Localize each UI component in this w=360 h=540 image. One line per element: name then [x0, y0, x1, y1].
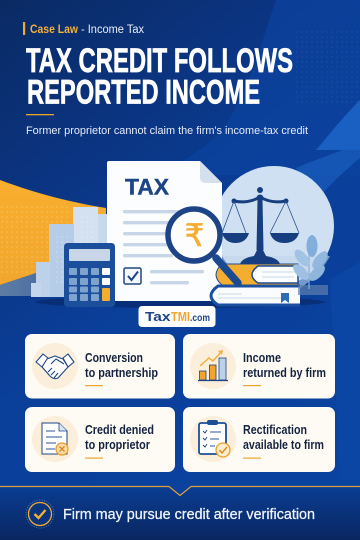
orange wedge — [0, 180, 106, 296]
light circle — [214, 166, 334, 286]
card: rectification: Rectification — [243, 423, 307, 437]
ground shadow — [35, 296, 325, 308]
card: rectification — [183, 407, 335, 472]
title: REPORTED INCOME — [27, 74, 260, 112]
magnifier: ₹ — [185, 218, 204, 254]
logo: TaxTMI.com: TMI — [171, 309, 190, 324]
card: income: Income — [243, 351, 281, 365]
icon: check badge — [26, 500, 54, 528]
title — [26, 42, 293, 112]
card: credit denied: to proprietor — [85, 438, 150, 452]
document — [107, 161, 222, 301]
footer banner: Firm may pursue credit after verification — [63, 506, 315, 523]
scales — [222, 187, 299, 264]
subtitle: Former proprietor cannot claim the firm's income-tax credit — [26, 125, 309, 137]
header label: - Income Tax — [81, 24, 144, 36]
illustration — [0, 161, 334, 308]
logo: TaxTMI.com: .com — [190, 313, 210, 324]
logo: TaxTMI.com: Tax — [145, 309, 171, 324]
logo: TaxTMI.com — [138, 306, 216, 327]
header label — [23, 22, 144, 36]
card: credit denied: Credit denied — [85, 423, 154, 437]
magnifier — [168, 209, 238, 283]
footer banner — [0, 486, 360, 540]
card: rectification: available to firm — [243, 438, 324, 452]
icon: chart — [198, 350, 228, 380]
card: income — [183, 334, 335, 398]
card: conversion: Conversion — [85, 351, 143, 365]
icon: document with cross — [42, 423, 68, 455]
card: income: returned by firm — [243, 366, 326, 380]
plant — [290, 235, 331, 295]
checkbox — [124, 268, 141, 284]
header label: Case Law — [30, 24, 78, 36]
card: credit denied — [25, 407, 175, 472]
icon: handshake — [36, 354, 74, 379]
icon: clipboard — [199, 420, 230, 457]
calculator — [64, 243, 115, 307]
buildings — [31, 207, 108, 297]
document: TAX — [125, 174, 169, 200]
card: conversion: to partnership — [85, 366, 158, 380]
card: conversion — [25, 334, 175, 398]
books — [211, 264, 300, 305]
